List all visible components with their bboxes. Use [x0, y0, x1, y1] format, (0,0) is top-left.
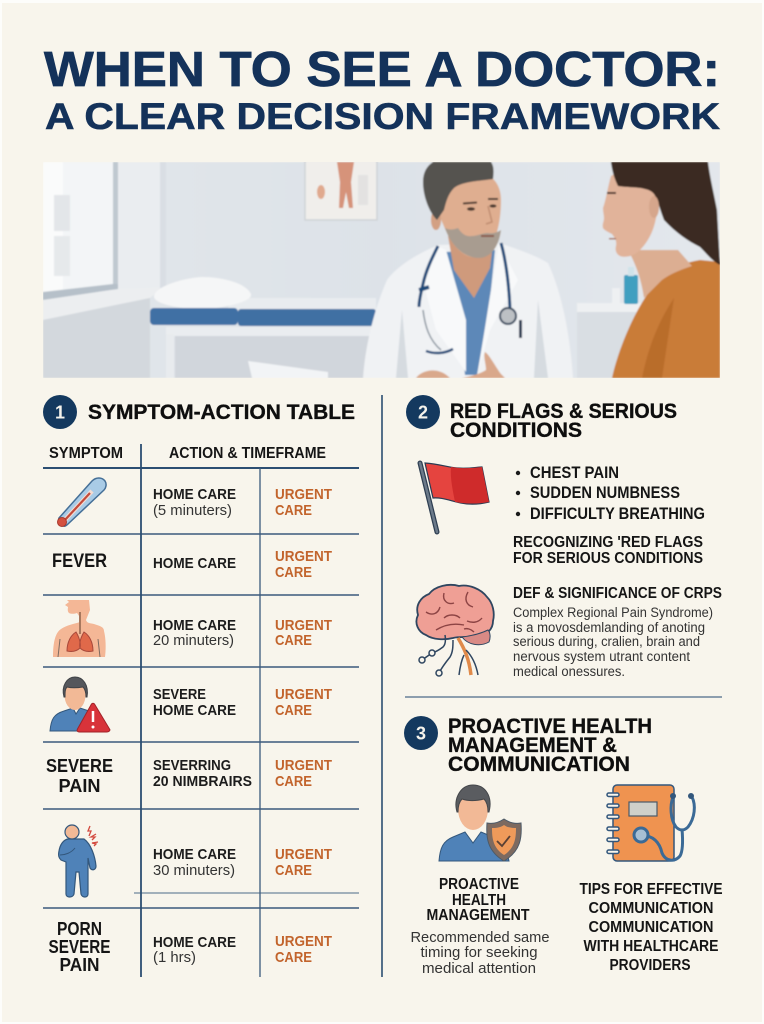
- communication tips text: WITH HEALTHCARE: [584, 938, 719, 955]
- row 5: URGENT: [275, 757, 332, 774]
- photo: doctor consulting patient: [43, 160, 720, 378]
- icon: thermometer: [58, 478, 106, 526]
- row 6: 30 minuters): [153, 862, 235, 879]
- title: WHEN TO SEE A DOCTOR:: [44, 43, 720, 97]
- row 4: URGENT: [275, 686, 332, 703]
- doctor head: [448, 236, 494, 298]
- woman hair: [611, 162, 720, 265]
- row 4: [153, 686, 332, 719]
- section 2: red flags and serious conditions: [406, 395, 722, 679]
- section 3 heading: MANAGEMENT &: [448, 734, 617, 757]
- row 6: [153, 846, 332, 879]
- woman neck: [628, 250, 692, 298]
- row 2: HOME CARE: [153, 555, 236, 572]
- red flags caption: [513, 534, 703, 567]
- red flags caption: RECOGNIZING 'RED FLAGS: [513, 534, 703, 551]
- row 7: PORN: [57, 919, 102, 939]
- icon: red flag: [420, 463, 489, 532]
- row 5: CARE: [275, 773, 312, 790]
- row 3: 20 minuters): [153, 632, 234, 649]
- CRPS definition: Complex Regional Pain Syndrome): [513, 605, 713, 620]
- row 4: CARE: [275, 702, 312, 719]
- row 1: (5 minuters): [153, 502, 232, 519]
- section number 2: 2: [418, 402, 428, 422]
- row 1: CARE: [275, 502, 312, 519]
- row 4: SEVERE: [153, 686, 206, 703]
- row 2: [52, 548, 332, 581]
- row 5: PAIN: [58, 775, 100, 796]
- exam bed: [230, 298, 376, 310]
- row 7: SEVERE: [48, 937, 110, 957]
- poster: [305, 160, 377, 220]
- section 2 heading: [450, 400, 677, 442]
- section 3 heading: [448, 715, 652, 776]
- section number 1: 1: [55, 402, 65, 422]
- doctor face details: [463, 198, 498, 237]
- woman: [612, 260, 720, 378]
- table header: [49, 445, 326, 462]
- CRPS definition: serious during, cralien, brain and: [513, 634, 700, 649]
- section 3 heading: COMMUNICATION: [448, 753, 630, 776]
- red flag bullet list: SUDDEN NUMBNESS: [530, 483, 680, 502]
- row 3: [153, 617, 332, 649]
- proactive health management text: HEALTH: [452, 892, 506, 909]
- doctor hands: [416, 352, 505, 378]
- icon: lungs torso: [53, 600, 106, 657]
- section number 2: [406, 395, 440, 429]
- row 2: FEVER: [52, 551, 107, 572]
- row 5: SEVERRING: [153, 757, 231, 774]
- proactive health management text: timing for seeking: [420, 944, 538, 961]
- row 3: CARE: [275, 632, 312, 649]
- row 3: HOME CARE: [153, 617, 236, 634]
- row 7: CARE: [275, 949, 312, 966]
- communication tips text: PROVIDERS: [610, 957, 691, 974]
- row 7: URGENT: [275, 933, 332, 950]
- row 1: [153, 486, 332, 519]
- icon: person with shield: [439, 785, 521, 861]
- section 2 heading: CONDITIONS: [450, 419, 582, 442]
- section 3: proactive health management and communication: [404, 715, 723, 977]
- red flag bullet list: [516, 463, 705, 523]
- icon: person with chest pain: [59, 825, 98, 897]
- proactive health management text: MANAGEMENT: [426, 907, 530, 924]
- section number 3: [404, 716, 438, 750]
- woman face: [603, 172, 657, 257]
- lapels: [444, 250, 468, 372]
- doctor shirt: [445, 250, 495, 375]
- CRPS definition: nervous system utrant content: [513, 649, 690, 664]
- row 7: [48, 919, 332, 975]
- proactive health management text: Recommended same: [410, 929, 550, 946]
- row 7: HOME CARE: [153, 934, 236, 951]
- row 5: [46, 755, 332, 796]
- proactive health management text: PROACTIVE: [439, 876, 519, 893]
- row 3: URGENT: [275, 617, 332, 634]
- stethoscope: [419, 243, 510, 309]
- CRPS definition: DEF & SIGNIFICANCE OF CRPS: [513, 585, 722, 602]
- communication tips text: [580, 881, 723, 974]
- doctor hair: [423, 162, 494, 220]
- row 4: HOME CARE: [153, 702, 236, 719]
- table header: ACTION & TIMEFRAME: [169, 445, 326, 462]
- section 2 heading: RED FLAGS & SERIOUS: [450, 400, 677, 423]
- CRPS definition: medical onessures.: [513, 664, 625, 679]
- icon: person with warning triangle: [50, 677, 110, 732]
- title: [44, 43, 720, 137]
- section 1 heading: SYMPTOM-ACTION TABLE: [88, 401, 355, 424]
- section number 3: 3: [416, 724, 426, 744]
- icon: notebook and stethoscope: [607, 785, 694, 861]
- row 2: URGENT: [275, 548, 332, 565]
- row 1: HOME CARE: [153, 486, 236, 503]
- row 1: URGENT: [275, 486, 332, 503]
- side table: [614, 314, 634, 362]
- row 6: URGENT: [275, 846, 332, 863]
- row 7: PAIN: [60, 955, 100, 975]
- red flags caption: FOR SERIOUS CONDITIONS: [513, 550, 703, 567]
- communication tips text: COMMUNICATION: [588, 919, 714, 936]
- red flag bullet list: CHEST PAIN: [530, 463, 619, 482]
- proactive health management text: [410, 876, 550, 977]
- proactive health management text: medical attention: [422, 960, 536, 977]
- red flag bullet list: DIFFICULTY BREATHING: [530, 504, 705, 523]
- row 7: (1 hrs): [153, 949, 196, 966]
- section number 1: [43, 395, 77, 429]
- CRPS definition: is a movosdemlanding of anoting: [513, 620, 705, 635]
- doctor beard: [445, 228, 501, 258]
- table header: SYMPTOM: [49, 445, 123, 462]
- section 3 heading: PROACTIVE HEALTH: [448, 715, 652, 738]
- communication tips text: COMMUNICATION: [588, 900, 714, 917]
- row 5: 20 NIMBRAIRS: [153, 773, 252, 790]
- row 5: SEVERE: [46, 755, 113, 776]
- doctor coat: [363, 243, 573, 378]
- CRPS definition: [513, 585, 722, 679]
- row 2: CARE: [275, 564, 312, 581]
- title: A CLEAR DECISION FRAMEWORK: [45, 96, 720, 137]
- row 6: CARE: [275, 862, 312, 879]
- row 6: HOME CARE: [153, 846, 236, 863]
- icon: brain and nerves: [416, 585, 494, 676]
- communication tips text: TIPS FOR EFFECTIVE: [580, 881, 723, 898]
- section 1: symptom-action table: [43, 395, 359, 977]
